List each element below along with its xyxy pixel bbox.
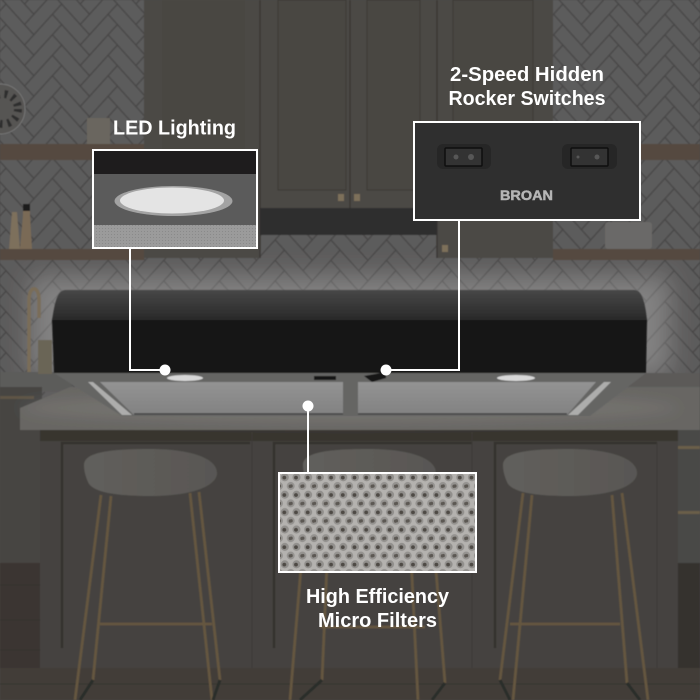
- upper cabinets: [144, 0, 553, 258]
- heading: 2-Speed Hidden Rocker Switches: 2-Speed Hidden: [450, 64, 604, 86]
- light right: [497, 375, 535, 381]
- leader dot: [380, 364, 392, 376]
- filter bottom shadow: [134, 413, 567, 415]
- leader dot: [302, 400, 314, 412]
- back cabinets left: [0, 387, 42, 563]
- bottles: [9, 204, 32, 249]
- callout: LED lighting: [93, 118, 257, 376]
- back counter left: [0, 372, 72, 392]
- brand logo: BROAN: [500, 187, 553, 203]
- leader line: [130, 248, 165, 370]
- countertop: [20, 387, 700, 430]
- stool right: [500, 449, 648, 700]
- canister: [87, 118, 110, 144]
- stool left: [75, 449, 220, 700]
- hood front upper: [52, 290, 647, 320]
- heading: 2-Speed Hidden Rocker Switches: [448, 64, 606, 110]
- range hood: [52, 290, 647, 416]
- heading: High Efficiency Micro Filters: [306, 586, 450, 632]
- hood underside frame: [54, 373, 646, 416]
- hood front lower: [52, 320, 647, 373]
- light switch: [562, 144, 617, 169]
- kitchen island: [40, 430, 678, 668]
- leader dot: [160, 364, 170, 376]
- back cabinets right: [678, 430, 700, 670]
- wooden shelves: [0, 144, 700, 260]
- floor: [0, 563, 700, 700]
- callout: micro filters: [279, 400, 476, 632]
- tiled wall: [0, 0, 700, 400]
- light left: [167, 375, 203, 381]
- leader line: [386, 220, 459, 370]
- side vents: [88, 382, 611, 415]
- inset photo: filter mesh: [279, 473, 476, 572]
- left filter: [100, 382, 343, 415]
- callout: rocker switches: [380, 64, 640, 376]
- leader line: [307, 406, 309, 473]
- stool middle: [290, 449, 445, 700]
- inset photo: switches panel: [414, 122, 640, 220]
- counter glow: [20, 393, 680, 423]
- wall light glow: [30, 276, 670, 376]
- decorative plate: [0, 84, 25, 134]
- right filter: [358, 382, 596, 415]
- inset photo: LED light: [93, 150, 257, 248]
- heading: High Efficiency Micro Filters: High Efficiency: [306, 586, 450, 608]
- faucet: [29, 289, 39, 372]
- hood switches: [314, 372, 386, 382]
- fan switch: [437, 144, 491, 169]
- upper dark hood: [260, 208, 437, 235]
- heading: High Efficiency Micro Filters: Micro Filters: [318, 610, 437, 632]
- heading: 2-Speed Hidden Rocker Switches: Rocker Switches: [448, 88, 606, 110]
- back counter right: [628, 373, 700, 389]
- toaster: [605, 222, 652, 249]
- heading: LED Lighting: LED Lighting: [113, 118, 236, 140]
